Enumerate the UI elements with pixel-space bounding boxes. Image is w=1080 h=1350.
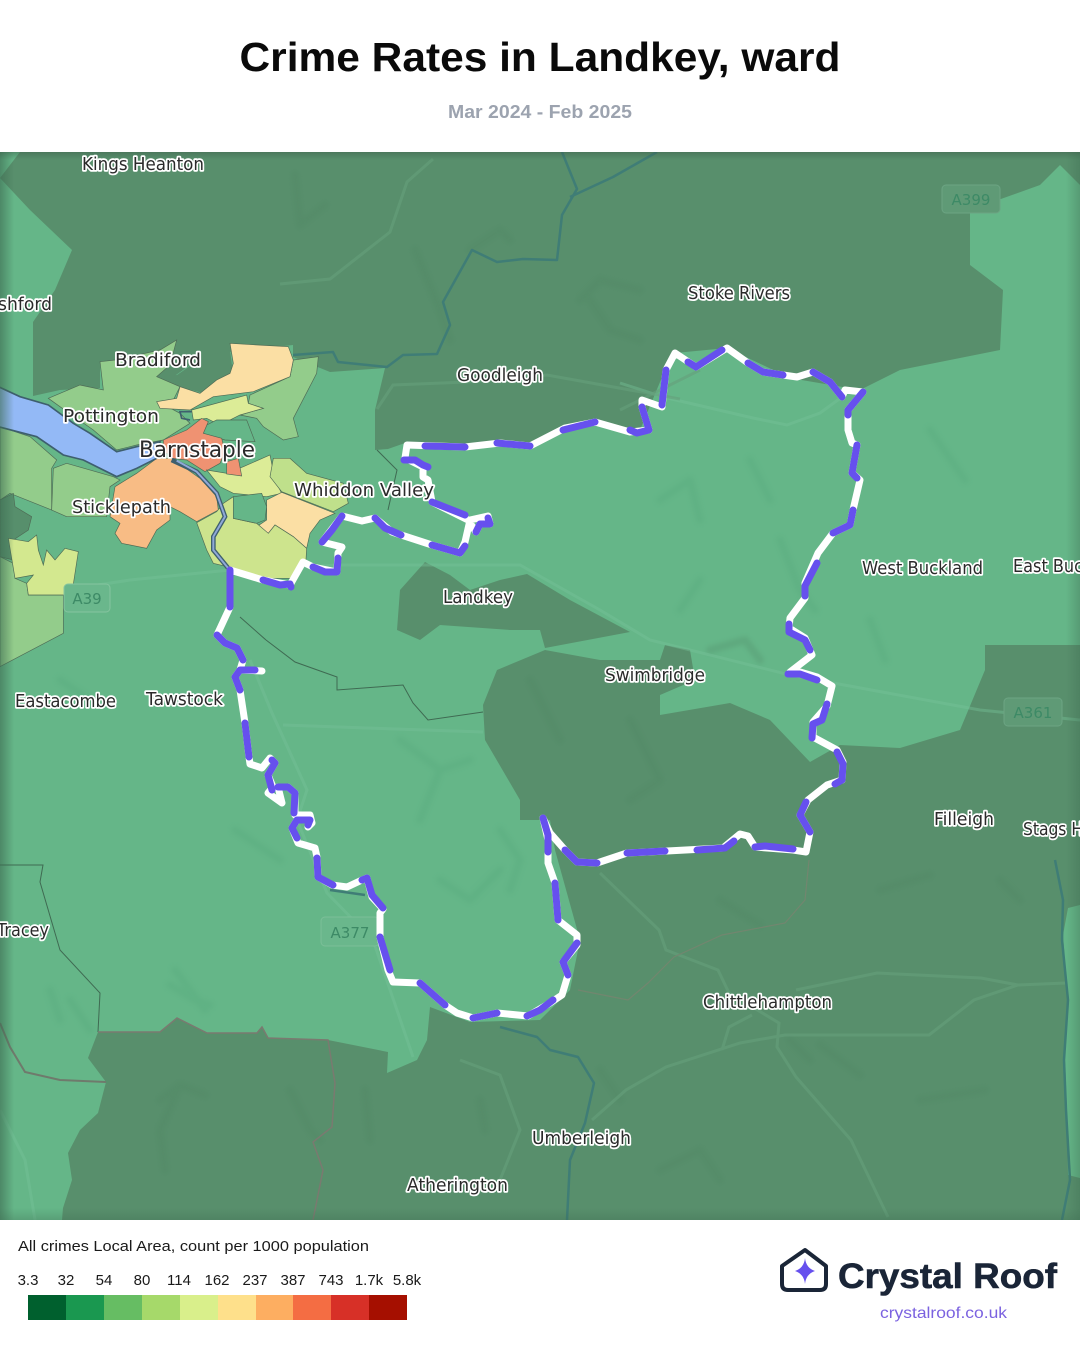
icon: house with star <box>782 1250 826 1290</box>
label: Goodleigh: Goodleigh <box>457 365 543 386</box>
ward: low-crime pocket <box>0 493 32 560</box>
label: Swimbridge: Swimbridge <box>605 665 705 686</box>
road shield A399 <box>942 185 1000 213</box>
label: Atherington: Atherington <box>407 1175 508 1196</box>
roads on dark ground <box>280 159 1066 1217</box>
label: Barnstaple: Barnstaple <box>139 438 255 463</box>
label: Landkey: Landkey <box>443 587 513 608</box>
legend <box>18 1238 422 1320</box>
river Taw water <box>177 461 228 568</box>
road shield A361: A361 <box>1014 704 1052 722</box>
road shield A39 <box>64 584 110 612</box>
legend values: 743 <box>318 1272 344 1289</box>
legend values: 80 <box>134 1272 150 1289</box>
ward: light green Whiddon <box>270 458 348 512</box>
label: Pottington: Pottington <box>63 406 159 427</box>
legend values: 237 <box>242 1272 268 1289</box>
road shield A377 <box>321 917 379 946</box>
legend values: 387 <box>280 1272 306 1289</box>
ward: cream north <box>157 343 293 410</box>
legend values: 5.8k <box>393 1272 422 1289</box>
place labels <box>0 154 1080 1196</box>
Landkey ward boundary <box>217 348 863 1018</box>
ward: yellow green centre <box>192 395 263 425</box>
label: West Buckland: West Buckland <box>862 558 983 579</box>
label: Bradiford: Bradiford <box>115 350 201 371</box>
label: Chittlehampton: Chittlehampton <box>703 992 832 1013</box>
ward: Sticklepath fringe <box>52 463 120 517</box>
Crystal Roof logo <box>782 1250 1057 1322</box>
label: Sticklepath: Sticklepath <box>72 497 171 518</box>
forest texture patches <box>708 638 762 662</box>
rivers <box>293 152 1070 1220</box>
river Taw channel <box>172 460 228 568</box>
ward: yellow green east <box>207 455 282 497</box>
label: Umberleigh: Umberleigh <box>532 1128 631 1149</box>
website: crystalroof.co.uk <box>880 1305 1008 1322</box>
ward: lower yellow green <box>197 497 307 578</box>
legend values: 162 <box>204 1272 230 1289</box>
town wards around Barnstaple <box>0 340 348 667</box>
date range subtitle: Mar 2024 - Feb 2025 <box>448 102 632 122</box>
brand name: Crystal Roof <box>838 1257 1057 1296</box>
ward: central green <box>203 420 255 442</box>
estuary <box>0 387 160 477</box>
label: Stoke Rivers: Stoke Rivers <box>688 283 790 304</box>
label: Eastacombe: Eastacombe <box>15 691 116 712</box>
edge shading <box>0 152 1080 1220</box>
road shield A399: A399 <box>952 191 990 209</box>
ward: lower left <box>0 557 63 667</box>
legend values <box>18 1272 422 1289</box>
legend title: All crimes Local Area, count per 1000 population <box>18 1238 369 1255</box>
label: Kings Heanton: Kings Heanton <box>82 154 204 175</box>
ward: small red <box>227 458 242 476</box>
label: Whiddon Valley: Whiddon Valley <box>294 480 434 501</box>
boundary: purple dashes <box>217 350 863 1018</box>
title: Crime Rates in Landkey, ward <box>240 34 840 80</box>
legend values: 1.7k <box>355 1272 384 1289</box>
legend values: 3.3 <box>18 1272 38 1289</box>
darker very-low-crime areas <box>0 152 1080 1220</box>
boundary: white line <box>217 348 863 1018</box>
legend colour scale <box>28 1295 407 1320</box>
legend values: 54 <box>96 1272 112 1289</box>
ward: east mid green <box>240 357 318 440</box>
label: Filleigh: Filleigh <box>934 809 994 830</box>
legend values: 32 <box>58 1272 74 1289</box>
east edge low-crime strip <box>1063 905 1080 1178</box>
Yeo inlet <box>180 412 192 420</box>
map base: low-crime areas <box>0 152 1080 1220</box>
ward: orange Sticklepath <box>110 458 218 548</box>
light road lines <box>421 382 1080 722</box>
road shield A39: A39 <box>72 590 102 608</box>
road shield A377: A377 <box>331 924 369 942</box>
label: Tawstock: Tawstock <box>145 689 224 710</box>
ward: town centre <box>163 418 225 472</box>
administrative boundaries <box>0 450 809 1220</box>
choropleth map <box>0 152 1080 1220</box>
ward: small green <box>233 493 267 523</box>
ward: yellow-green west <box>8 535 78 595</box>
ward: cream Whiddon <box>257 492 335 548</box>
legend values: 114 <box>167 1272 191 1289</box>
ward: west <box>0 427 57 510</box>
ward: Pottington <box>48 340 190 450</box>
road shield A361 <box>1004 698 1062 726</box>
